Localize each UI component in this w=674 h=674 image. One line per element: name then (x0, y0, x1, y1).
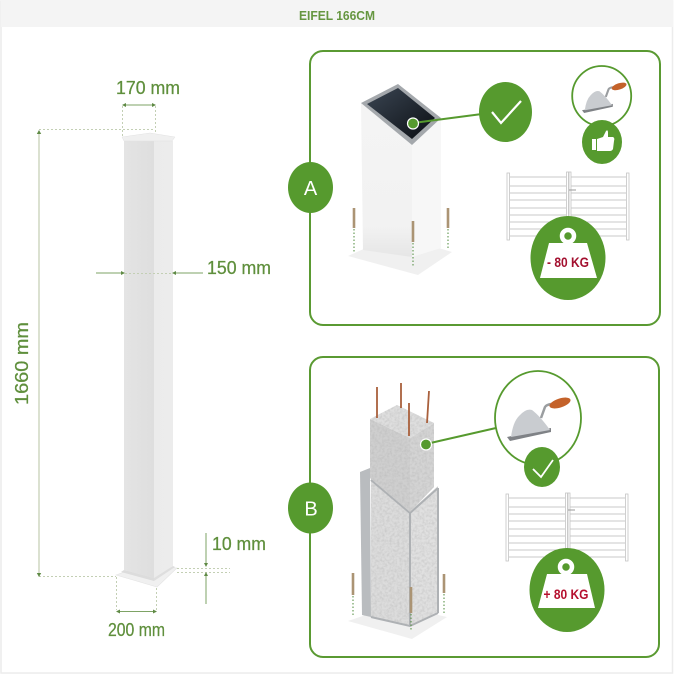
dimension: 170 mm: 170 mm (116, 78, 180, 98)
badge B: B (304, 498, 318, 520)
weight label B: + 80 KG (544, 587, 588, 602)
connector and trowel B (420, 371, 581, 465)
post body (121, 133, 175, 581)
screws A (354, 208, 448, 267)
dimension: height (12, 130, 155, 577)
badge B (288, 482, 333, 534)
header band (1, 0, 673, 27)
title: EIFEL 166CM (299, 8, 375, 23)
dimension: 200 mm (108, 577, 165, 640)
dimension: 150 mm (96, 258, 271, 278)
hollow post A (348, 84, 452, 275)
dimension: 150 mm: 150 mm (207, 258, 271, 278)
badge A (288, 162, 333, 213)
check badge B (524, 447, 560, 487)
main post with dimensions (12, 78, 271, 640)
gate A (507, 172, 629, 240)
gate B (506, 493, 628, 561)
screws B (353, 573, 444, 630)
rebars (377, 383, 429, 436)
weight badge B (530, 548, 604, 632)
weight label A: - 80 KG (547, 255, 589, 270)
icon: trowel A (572, 66, 631, 126)
post base plate (116, 566, 177, 587)
dimension: 170 mm (116, 78, 180, 136)
dimension: 10 mm: 10 mm (212, 534, 266, 554)
panel: option B (288, 357, 659, 657)
icon: thumbs up (582, 120, 622, 164)
concrete-filled post B (348, 405, 447, 639)
dimension: 10 mm (177, 533, 266, 604)
badge A: A (304, 178, 318, 200)
weight badge A (530, 216, 606, 300)
panel: option A (288, 51, 660, 325)
dimension: 200 mm: 200 mm (108, 620, 165, 640)
dimension: height: 1660 mm (12, 322, 32, 405)
connector and check A (408, 82, 532, 142)
